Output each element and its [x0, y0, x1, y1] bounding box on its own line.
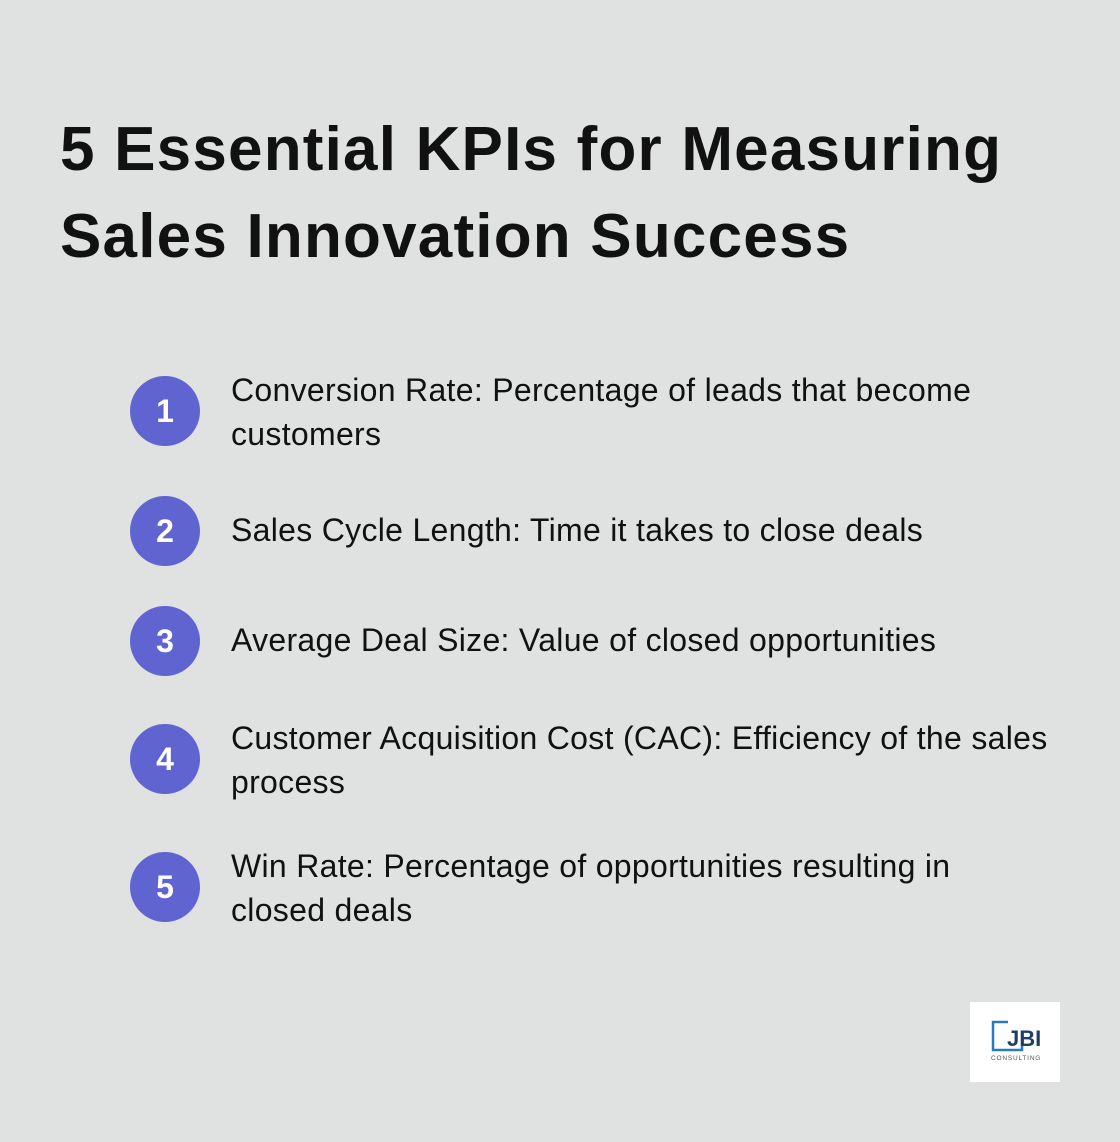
text 2: Sales Cycle Length: Time it takes to close deals [231, 512, 923, 548]
text 1: customers [231, 416, 381, 452]
badge 3: 3 [156, 623, 174, 659]
badge 2 [130, 496, 200, 566]
text 4: Customer Acquisition Cost (CAC): Efficiency of the sales [231, 720, 1048, 756]
item 3 [130, 606, 936, 676]
logo: JBI [1007, 1026, 1041, 1051]
text 1 [231, 372, 971, 452]
badge 5: 5 [156, 869, 174, 905]
badge 4: 4 [156, 741, 174, 777]
text 4: process [231, 764, 345, 800]
badge 3 [130, 606, 200, 676]
item 5 [130, 848, 950, 928]
badge 2: 2 [156, 513, 174, 549]
title: 5 Essential KPIs for Measuring [60, 115, 1002, 184]
title: Sales Innovation Success [60, 202, 850, 271]
text 3: Average Deal Size: Value of closed opportunities [231, 622, 936, 658]
item 1 [130, 372, 971, 452]
badge 5 [130, 852, 200, 922]
badge 1 [130, 376, 200, 446]
text 5: Win Rate: Percentage of opportunities resulting in [231, 848, 950, 884]
text 4 [231, 720, 1048, 800]
logo: CONSULTING [991, 1055, 1041, 1062]
item 2 [130, 496, 923, 566]
text 5: closed deals [231, 892, 412, 928]
text 1: Conversion Rate: Percentage of leads that become [231, 372, 971, 408]
badge 1: 1 [156, 393, 174, 429]
badge 4 [130, 724, 200, 794]
title [60, 115, 1002, 271]
item 4 [130, 720, 1048, 800]
text 5 [231, 848, 950, 928]
logo [970, 1002, 1060, 1082]
